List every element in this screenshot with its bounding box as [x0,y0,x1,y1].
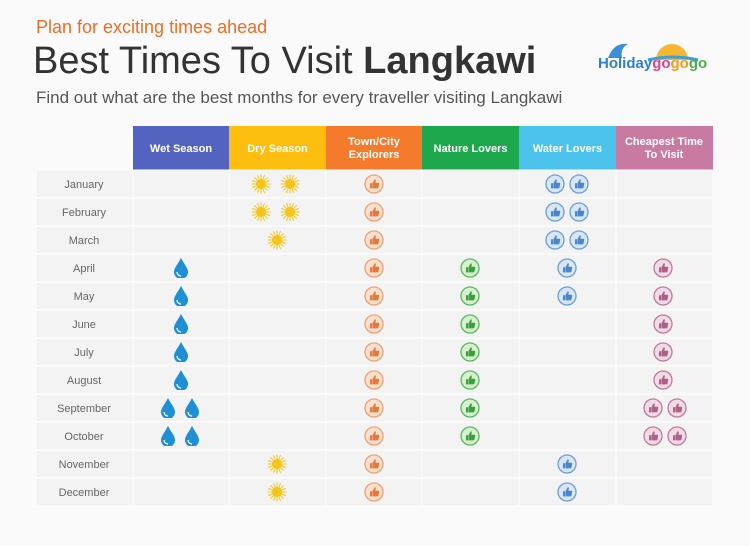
month labels: December [59,487,110,499]
grid rows [36,170,713,506]
nature thumbs [461,259,479,445]
month labels: March [69,235,99,247]
town thumbs [365,175,383,501]
month labels: May [74,291,95,303]
headers: Dry Season [247,143,308,155]
kicker: Plan for exciting times ahead [36,17,267,37]
dry season suns [252,174,300,502]
month labels: August [67,375,101,387]
month labels: February [62,207,107,219]
month labels [57,179,111,499]
title: Best Times To Visit Langkawi [33,40,536,82]
month labels: July [74,347,94,359]
month labels: April [73,263,95,275]
headers: Cheapest Time [625,136,703,148]
headers: Nature Lovers [434,143,507,155]
cheapest thumbs [644,259,686,445]
headers: To Visit [645,149,684,161]
headers [133,126,713,170]
logo: Holidaygogogo [598,55,707,72]
headers: Town/City [348,136,401,148]
month labels: November [59,459,110,471]
headers: Explorers [349,149,399,161]
month labels: October [64,431,104,443]
month labels: September [57,403,111,415]
month labels: January [64,179,104,191]
logo [598,44,707,72]
headers: Water Lovers [533,143,602,155]
headers: Wet Season [150,143,212,155]
month labels: June [72,319,96,331]
subtitle: Find out what are the best months for every traveller visiting Langkawi [36,88,562,107]
wet season drops [161,258,199,447]
water thumbs [546,175,588,501]
